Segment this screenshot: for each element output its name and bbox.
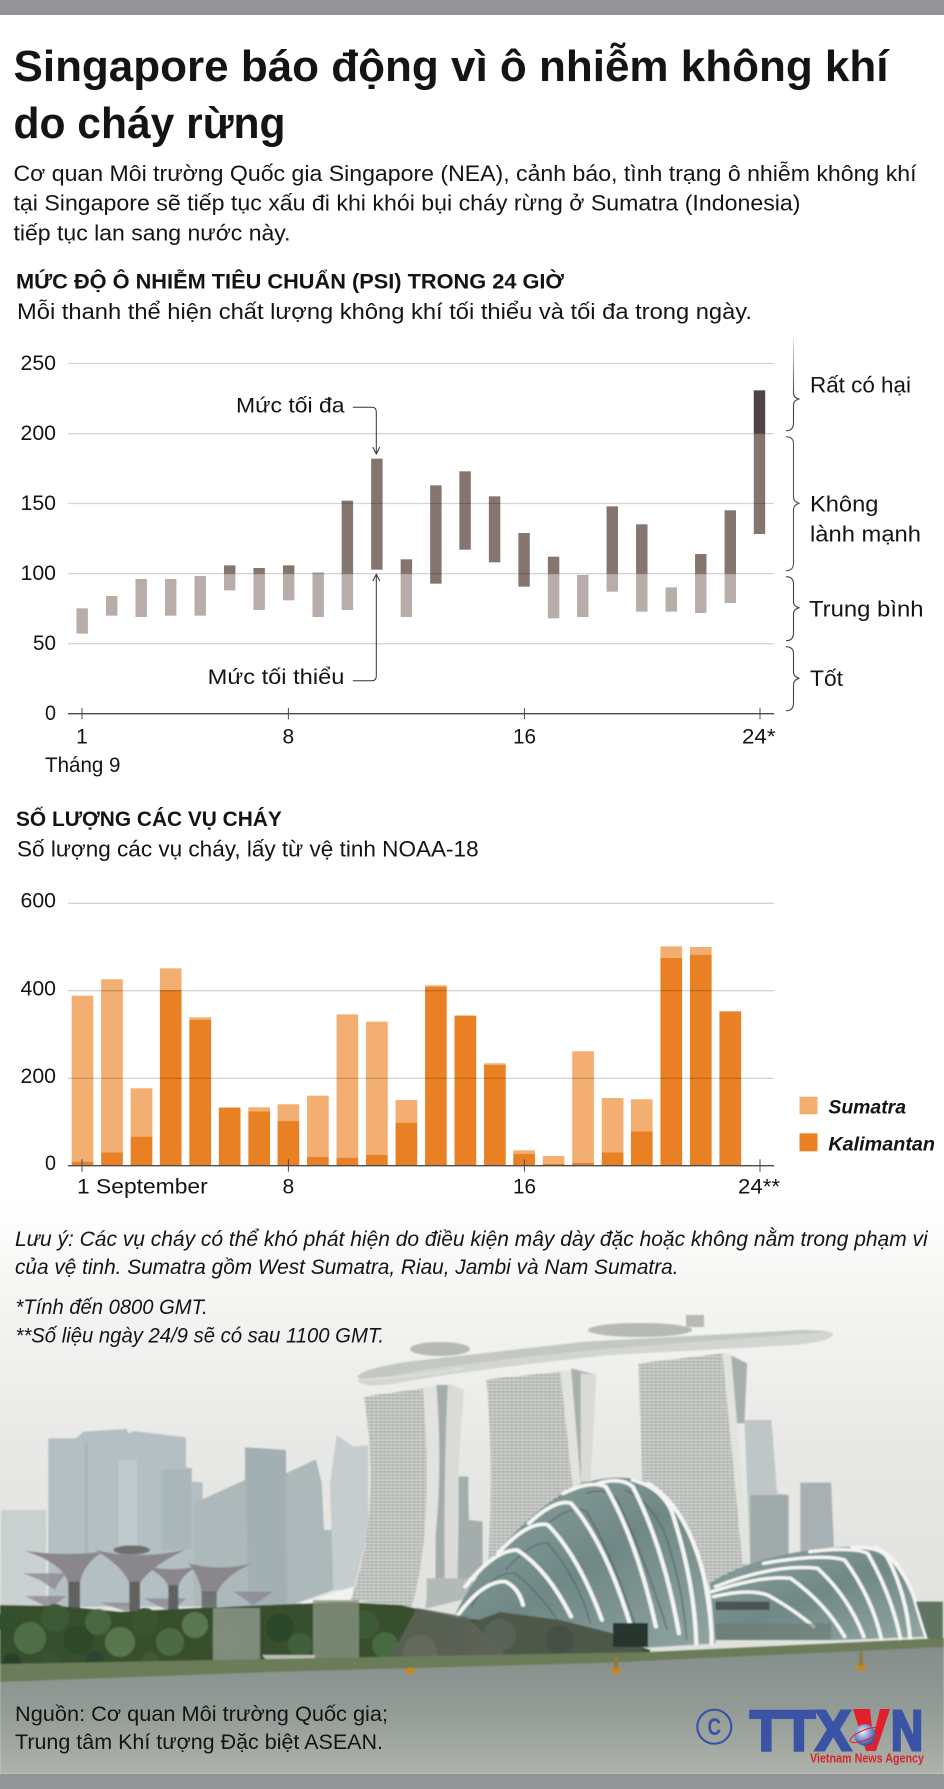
fires x axis labels: 24** <box>738 1175 780 1198</box>
callout: minimum level: Mức tối thiểu <box>208 665 344 689</box>
PSI x axis labels: Tháng 9 <box>45 754 120 777</box>
source <box>15 1702 388 1754</box>
tree canopy texture <box>0 1604 437 1671</box>
fires y axis labels: 600 <box>20 889 56 912</box>
title: Singapore báo động vì ô nhiễm không khí <box>14 41 890 91</box>
fires x axis labels: 1 September <box>77 1175 208 1198</box>
PSI grid lines <box>68 364 774 644</box>
brace: very unhealthy: Rất có hại <box>810 372 911 397</box>
intro text: tại Singapore sẽ tiếp tục xấu đi khi khói bụi cháy rừng ở Sumatra (Indonesia) <box>14 191 800 216</box>
PSI x axis and ticks <box>68 708 774 719</box>
PSI y axis labels: 150 <box>20 492 56 515</box>
fires x axis labels: 8 <box>283 1175 294 1198</box>
chart: PSI range bars <box>20 332 924 777</box>
brace: good <box>786 647 843 711</box>
callout: maximum level: Mức tối đa <box>236 393 345 417</box>
PSI x axis labels: 8 <box>283 725 294 748</box>
title: do cháy rừng <box>14 99 286 148</box>
subheading: PSI chart: Mỗi thanh thể hiện chất lượng không khí tối thiểu và tối đa trong ngày. <box>17 299 752 324</box>
title <box>14 41 890 148</box>
brace: unhealthy <box>786 437 921 571</box>
legend: Kalimantan <box>828 1134 935 1156</box>
note text: của vệ tinh. Sumatra gồm West Sumatra, Riau, Jambi và Nam Sumatra. <box>15 1256 678 1279</box>
footnotes: *Tính đến 0800 GMT. <box>16 1296 208 1319</box>
brace: unhealthy: Không <box>810 492 878 517</box>
heading: PSI chart: MỨC ĐỘ Ô NHIỄM TIÊU CHUẨN (PSI) TRONG 24 GIỜ <box>16 267 565 293</box>
fires y axis labels <box>20 889 56 1175</box>
PSI x axis labels <box>45 725 776 777</box>
fires x axis and ticks <box>68 1159 774 1172</box>
top band <box>0 0 944 15</box>
note text <box>15 1228 929 1279</box>
heading: fires chart: SỐ LƯỢNG CÁC VỤ CHÁY <box>16 805 282 831</box>
fires x axis labels: 16 <box>513 1175 536 1198</box>
legend <box>800 1096 935 1156</box>
note text: Lưu ý: Các vụ cháy có thể khó phát hiện do điều kiện mây dày đặc hoặc không nằm trong phạm vi <box>15 1228 929 1251</box>
fires y axis labels: 0 <box>45 1152 56 1175</box>
source: Trung tâm Khí tượng Đặc biệt ASEAN. <box>15 1730 383 1754</box>
brace: unhealthy: lành mạnh <box>810 522 921 547</box>
PSI x axis labels: 16 <box>513 725 536 748</box>
PSI y axis labels: 200 <box>20 422 56 445</box>
bottom band <box>0 1774 944 1789</box>
fires x axis labels <box>77 1175 780 1198</box>
logo: TTXVN Vietnam News Agency: Vietnam News Agency <box>810 1751 924 1765</box>
intro text: tiếp tục lan sang nước này. <box>14 221 290 246</box>
intro text <box>14 161 917 246</box>
callout: minimum level <box>208 574 380 689</box>
PSI y axis labels: 100 <box>20 562 56 585</box>
Sumatra bars <box>72 946 712 1164</box>
brace: good: Tốt <box>810 666 843 691</box>
background photo: Marina Bay Sands in haze <box>0 1200 944 1774</box>
subheading: fires chart: Số lượng các vụ cháy, lấy từ vệ tinh NOAA-18 <box>17 837 479 862</box>
PSI x axis labels: 1 <box>76 725 88 748</box>
PSI y axis labels: 250 <box>20 352 56 375</box>
source: Nguồn: Cơ quan Môi trường Quốc gia; <box>15 1702 388 1726</box>
Kalimantan bars <box>72 955 741 1166</box>
PSI y axis labels: 50 <box>33 632 56 655</box>
PSI bars <box>76 390 765 634</box>
intro text: Cơ quan Môi trường Quốc gia Singapore (NEA), cảnh báo, tình trạng ô nhiễm không khí <box>14 161 917 186</box>
PSI x axis labels: 24* <box>742 725 776 748</box>
brace: moderate <box>786 577 924 641</box>
logo: TTXVN Vietnam News Agency <box>697 1699 924 1765</box>
logo: TTXVN Vietnam News Agency: TTX <box>750 1699 851 1763</box>
callout: maximum level <box>236 393 380 454</box>
logo: TTXVN Vietnam News Agency: N <box>891 1699 923 1763</box>
footnotes: **Số liệu ngày 24/9 sẽ có sau 1100 GMT. <box>16 1325 384 1348</box>
PSI y axis labels <box>20 352 56 725</box>
fires y axis labels: 400 <box>20 978 56 1001</box>
brace: moderate: Trung bình <box>809 597 924 622</box>
footnotes <box>16 1296 384 1348</box>
brace: very unhealthy <box>786 332 911 431</box>
logo: TTXVN Vietnam News Agency: C <box>708 1714 721 1741</box>
chart: fire counts stacked bars <box>20 889 935 1198</box>
legend: Sumatra <box>828 1096 906 1118</box>
fires grid lines <box>68 903 774 1078</box>
fires y axis labels: 200 <box>20 1065 56 1088</box>
PSI y axis labels: 0 <box>45 702 56 725</box>
